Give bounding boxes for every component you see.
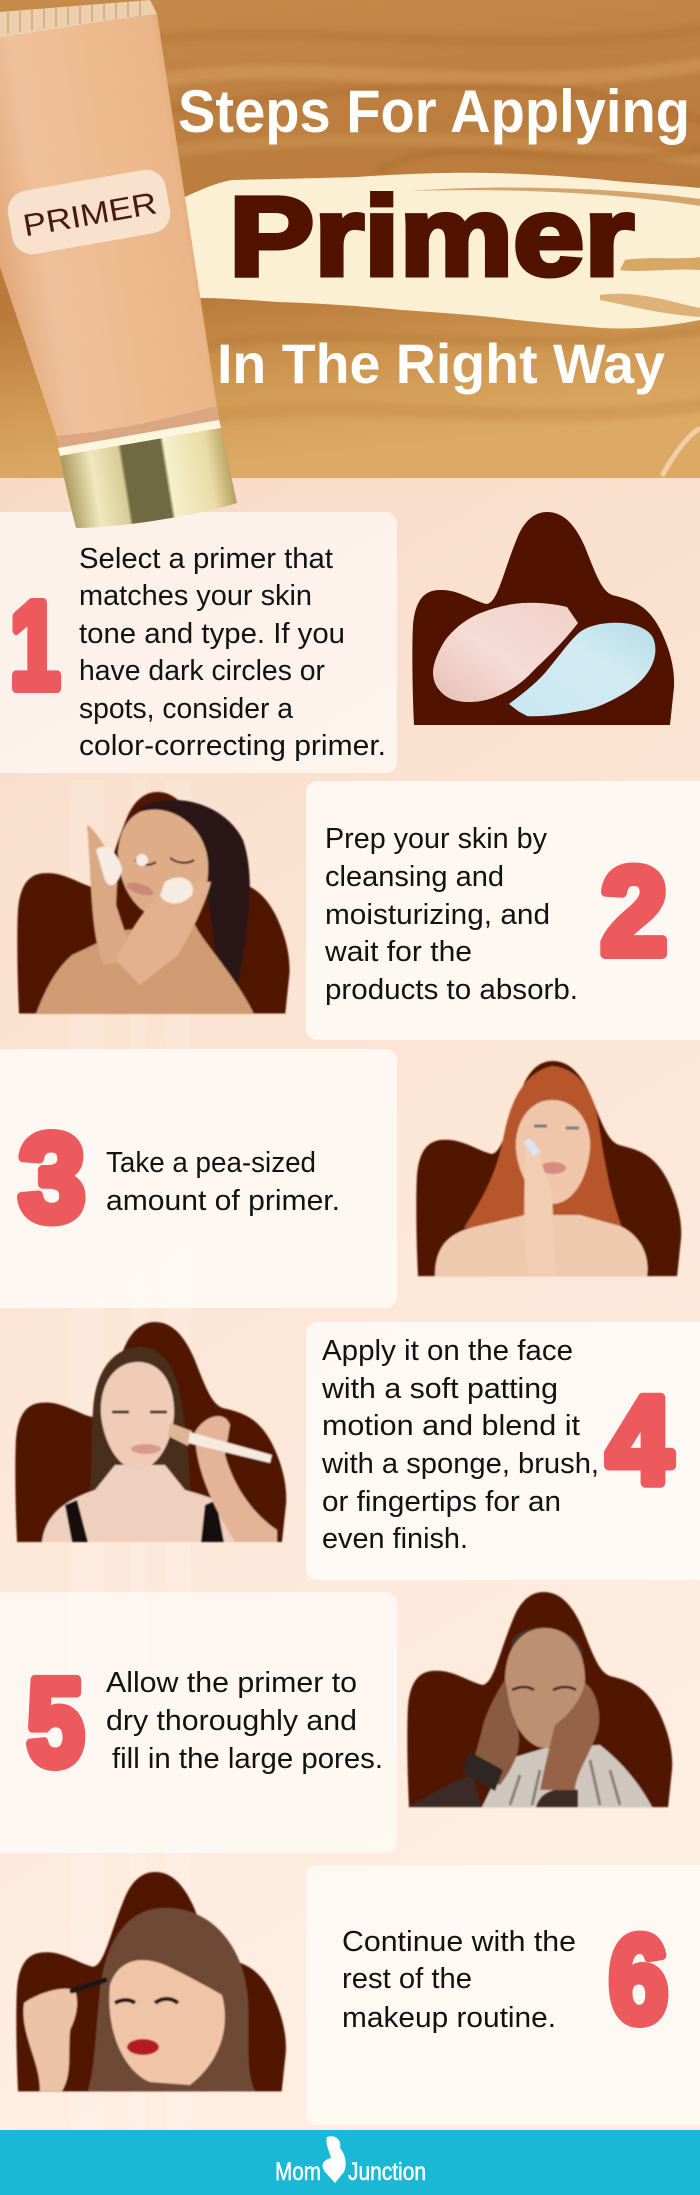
number 4: 4: [607, 1373, 672, 1510]
face: [109, 1960, 225, 2085]
step 1 text: color-correcting primer.: [79, 730, 386, 762]
primer dab: [524, 1138, 541, 1156]
step 1 text: spots, consider a: [79, 693, 294, 725]
arm and hand: [195, 1416, 277, 1542]
step 3 text: Take a pea-sized: [106, 1147, 316, 1179]
lips: [127, 2039, 159, 2055]
shirt: [482, 1745, 652, 1807]
black straps: [65, 1500, 224, 1542]
step 2 text: cleansing and: [325, 861, 504, 893]
hair: [88, 1908, 255, 2091]
step 4 text: or fingertips for an: [322, 1486, 561, 1518]
logo: [275, 2136, 426, 2186]
image: woman massaging face: [407, 1592, 672, 1807]
step 6 text: [342, 1926, 576, 2034]
number 3: 3: [19, 1110, 85, 1247]
step 2: [17, 792, 667, 1014]
brush stroke: [170, 173, 700, 329]
step 5 text: [106, 1667, 383, 1775]
image: primer swatches: [412, 512, 674, 725]
card 2: [306, 781, 700, 1040]
step 5: [27, 1592, 672, 1807]
watch: [462, 1752, 503, 1791]
footer band: [0, 2130, 700, 2195]
step 4 text: Apply it on the face: [322, 1335, 573, 1367]
number 6: 6: [609, 1912, 668, 2049]
step 6: [16, 1872, 668, 2091]
hand: [524, 1142, 556, 1275]
face: [101, 1362, 174, 1470]
card 4: [306, 1322, 700, 1580]
soft curtain light stripes: [70, 780, 191, 2130]
step 4: [15, 1322, 672, 1555]
product label: PRIMER: [20, 185, 159, 243]
image: red-haired woman applying primer: [416, 1061, 681, 1276]
face: [118, 810, 208, 921]
step 1 text: have dark circles or: [79, 655, 325, 687]
step 2 text: products to absorb.: [325, 974, 578, 1006]
icon: mother and child: [323, 2136, 346, 2183]
eyes: [112, 1410, 167, 1414]
step 2 text: wait for the: [324, 936, 472, 968]
tube crimp: [0, 0, 157, 38]
hair: [140, 800, 250, 1000]
step 6 text: makeup routine.: [342, 2002, 556, 2034]
face: [505, 1628, 585, 1748]
face: [516, 1100, 590, 1204]
step 6 text: Continue with the: [342, 1926, 576, 1958]
tube body: [0, 14, 221, 452]
step 3: [19, 1061, 681, 1276]
hand: [23, 1989, 77, 2091]
shoulders: [36, 925, 254, 1014]
number 1: 1: [10, 578, 60, 715]
image: woman cleansing face: [17, 792, 290, 1014]
step 3 text: amount of primer.: [106, 1185, 340, 1217]
step 4 text: [321, 1335, 599, 1555]
step 1 text: tone and type. If you: [79, 618, 345, 650]
title line 3: In The Right Way: [217, 332, 665, 395]
lips: [540, 1162, 566, 1174]
hair: [464, 1066, 622, 1228]
step 4 text: with a soft patting: [321, 1373, 558, 1405]
image: woman with eyebrow tool: [16, 1872, 286, 2091]
step 1: [10, 512, 674, 762]
lips: [131, 1444, 161, 1454]
number 5: 5: [27, 1655, 84, 1792]
number 2: 2: [601, 844, 667, 981]
foam: [96, 847, 193, 904]
step 1 text: Select a primer that: [79, 543, 333, 575]
eyes: [512, 1687, 576, 1690]
card 1: [0, 512, 397, 773]
step 4 text: with a sponge, brush,: [321, 1448, 599, 1480]
step 5 text: fill in the large pores.: [112, 1743, 383, 1775]
pink swatch: [433, 603, 578, 702]
step 5 text: Allow the primer to: [106, 1667, 357, 1699]
card 3: [0, 1049, 397, 1308]
step 6 text: rest of the: [342, 1963, 472, 1995]
title line 2: Primer: [229, 174, 634, 299]
image: woman with makeup brush: [15, 1322, 286, 1542]
right sleeve: [536, 1789, 578, 1807]
icon: primer tube: [0, 0, 237, 528]
left sleeve: [408, 1775, 482, 1807]
step 1 text: matches your skin: [79, 580, 312, 612]
eyes: [534, 1126, 579, 1128]
shoulders: [42, 1465, 277, 1542]
blue swatch: [509, 623, 655, 716]
right hand: [116, 882, 211, 985]
tube shade: [57, 406, 220, 450]
step 1 text: [79, 543, 386, 762]
lips: [125, 880, 155, 898]
brush: [168, 1423, 272, 1463]
closed eyes: [135, 858, 194, 865]
right hand: [540, 1683, 599, 1790]
product label: [5, 167, 173, 257]
page background: [0, 477, 700, 2132]
card 5: [0, 1592, 397, 1853]
step 4 text: even finish.: [322, 1523, 468, 1555]
tool: [72, 1980, 105, 1991]
step 3 text: [106, 1147, 340, 1217]
logo: Junction: [348, 2158, 426, 2186]
step 2 text: Prep your skin by: [325, 823, 547, 855]
logo: Mom: [275, 2158, 321, 2186]
step 5 text: dry thoroughly and: [106, 1705, 357, 1737]
hair: [510, 1628, 586, 1680]
eyes: [115, 1999, 178, 2003]
wood background: [0, 0, 700, 478]
step 4 text: motion and blend it: [322, 1410, 580, 1442]
hair: [90, 1347, 190, 1495]
left hand: [470, 1680, 519, 1785]
step 2 text: moisturizing, and: [325, 899, 550, 931]
step 2 text: [324, 823, 578, 1006]
card 6: [306, 1865, 700, 2125]
gold cap: [58, 420, 237, 528]
shoulders: [435, 1215, 648, 1276]
shirt stripes: [510, 1760, 620, 1805]
left hand: [87, 825, 134, 965]
header panel: [0, 0, 700, 478]
